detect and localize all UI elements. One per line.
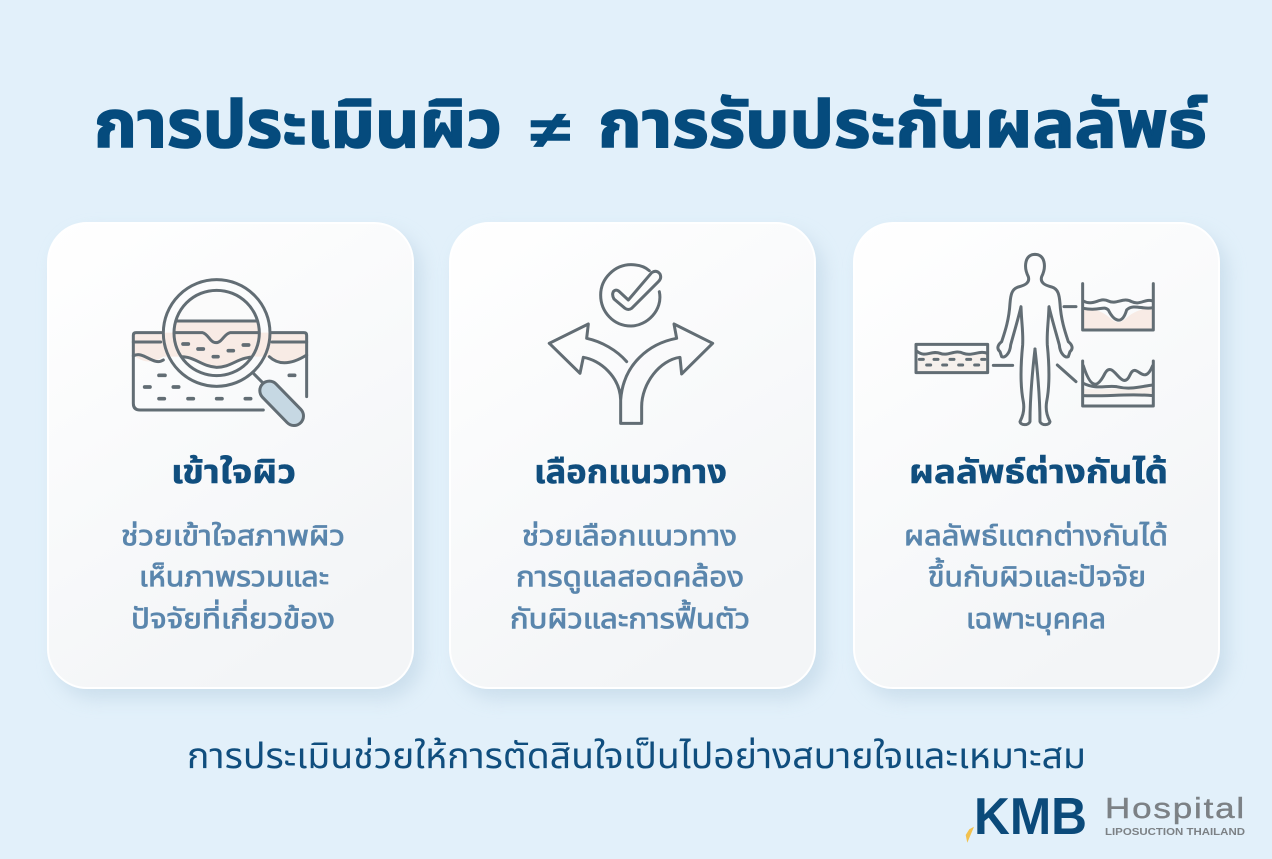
heading: choose approach: เลือกแนวทาง bbox=[534, 453, 727, 490]
text block: results vary: เฉพาะบุคคล bbox=[966, 603, 1106, 635]
logo: KMB Hospital: Hospital bbox=[1105, 793, 1246, 825]
text block: choose approach: กับผิวและการฟื้นตัว bbox=[510, 599, 750, 634]
text block: results vary bbox=[904, 520, 1168, 635]
logo: KMB Hospital bbox=[966, 788, 1246, 846]
heading: understand skin: เข้าใจผิว bbox=[171, 453, 296, 490]
title: ≠ bbox=[531, 102, 570, 158]
text block: choose approach bbox=[510, 520, 750, 634]
icon: body with skin cross-sections bbox=[916, 254, 1153, 425]
heading: results vary: ผลลัพธ์ต่างกันได้ bbox=[909, 453, 1168, 490]
title: การรับประกันผลลัพธ์ bbox=[598, 87, 1207, 161]
text block: results vary: ผลลัพธ์แตกต่างกันได้ bbox=[904, 520, 1168, 551]
panel: choose approach bbox=[450, 223, 824, 699]
text block: results vary: ขึ้นกับผิวและปัจจัย bbox=[928, 557, 1146, 592]
logo: KMB Hospital: KMB bbox=[974, 788, 1087, 846]
panel: results vary bbox=[854, 223, 1228, 699]
text block: understand skin: เห็นภาพรวมและ bbox=[139, 561, 329, 592]
icon: forked arrows with check bbox=[549, 265, 713, 423]
title: การประเมินผิว bbox=[94, 87, 502, 161]
panel: understand skin bbox=[48, 223, 422, 699]
text block: choose approach: ช่วยเลือกแนวทาง bbox=[522, 520, 737, 551]
icon: magnifier over skin layers bbox=[133, 280, 307, 416]
text block: understand skin: ช่วยเข้าใจสภาพผิว bbox=[121, 520, 345, 551]
logo: KMB Hospital: LIPOSUCTION THAILAND bbox=[1105, 826, 1245, 838]
text block: choose approach: การดูแลสอดคล้อง bbox=[516, 561, 744, 594]
text block: understand skin: ปัจจัยที่เกี่ยวข้อง bbox=[131, 599, 335, 634]
title bbox=[94, 87, 1207, 161]
text block: understand skin bbox=[121, 520, 345, 634]
callout: bottom statement: การประเมินช่วยให้การตัดสินใจเป็นไปอย่างสบายใจและเหมาะสม bbox=[187, 735, 1086, 776]
